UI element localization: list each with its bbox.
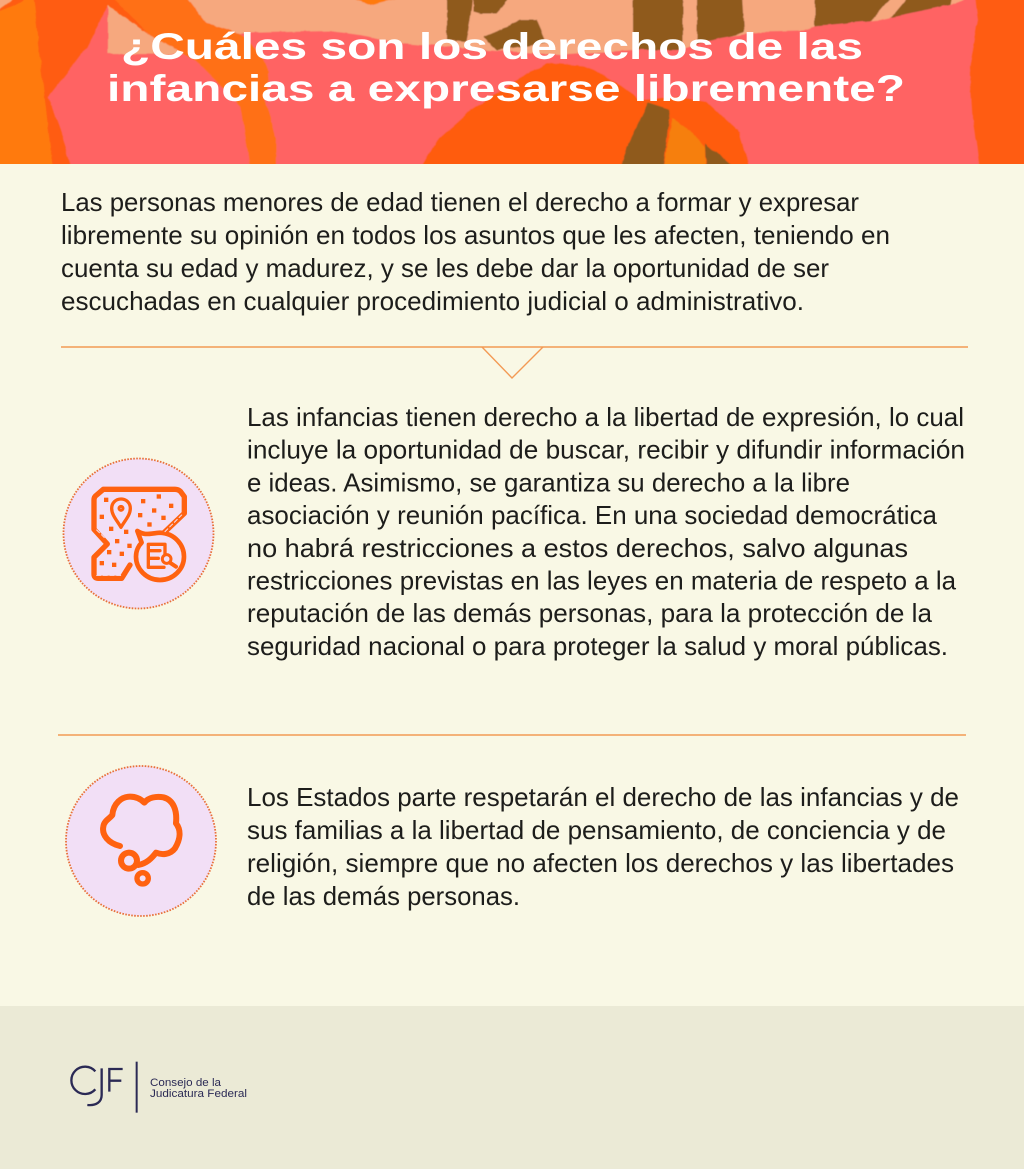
paragraph: freedom of expression: asociación y reunión pacífica. En una sociedad democrática xyxy=(247,500,938,530)
paragraph: freedom of expression: seguridad nacional o para proteger la salud y moral públicas. xyxy=(247,631,948,661)
paragraph: freedom of expression: Las infancias tienen derecho a la libertad de expresión, lo cual xyxy=(247,402,964,432)
intro paragraph: libremente su opinión en todos los asuntos que les afecten, teniendo en xyxy=(61,220,890,250)
paragraph: freedom of expression: no habrá restricciones a estos derechos, salvo algunas xyxy=(247,533,908,563)
paragraph: freedom of expression: reputación de las demás personas, para la protección de la xyxy=(247,598,933,628)
paragraph: freedom of expression: restricciones previstas en las leyes en materia de respeto a la xyxy=(247,566,957,596)
title: ¿Cuáles son los derechos de las xyxy=(121,26,863,67)
paragraph: freedom of thought: sus familias a la libertad de pensamiento, de conciencia y de xyxy=(247,815,946,845)
paragraph: freedom of thought: religión, siempre que no afecten los derechos y las libertades xyxy=(247,848,954,878)
icon: map with search bubble xyxy=(64,458,214,608)
title xyxy=(107,26,905,109)
paragraph: freedom of expression: e ideas. Asimismo, se garantiza su derecho a la libre xyxy=(247,467,850,497)
divider with down-pointing triangle xyxy=(61,347,968,378)
intro paragraph: cuenta su edad y madurez, y se les debe dar la oportunidad de ser xyxy=(61,253,829,283)
title: infancias a expresarse libremente? xyxy=(107,68,905,109)
logo: Consejo de la Judicatura Federal xyxy=(71,1062,247,1113)
paragraph: freedom of expression: incluye la oportunidad de buscar, recibir y difundir información xyxy=(247,435,965,465)
intro paragraph: Las personas menores de edad tienen el derecho a formar y expresar xyxy=(61,187,859,217)
intro paragraph: escuchadas en cualquier procedimiento judicial o administrativo. xyxy=(61,286,804,316)
paragraph: freedom of expression xyxy=(247,402,965,661)
logo: Consejo de la Judicatura Federal: Consejo de la xyxy=(150,1077,222,1089)
paragraph: freedom of thought xyxy=(247,782,959,911)
icon: thought bubble xyxy=(66,766,216,916)
logo: Consejo de la Judicatura Federal: Judicatura Federal xyxy=(150,1088,247,1100)
paragraph: freedom of thought: Los Estados parte respetarán el derecho de las infancias y de xyxy=(247,782,959,812)
header banner xyxy=(0,0,1024,170)
intro paragraph xyxy=(61,187,890,316)
footer band xyxy=(0,1006,1024,1169)
paragraph: freedom of thought: de las demás personas. xyxy=(247,881,520,911)
